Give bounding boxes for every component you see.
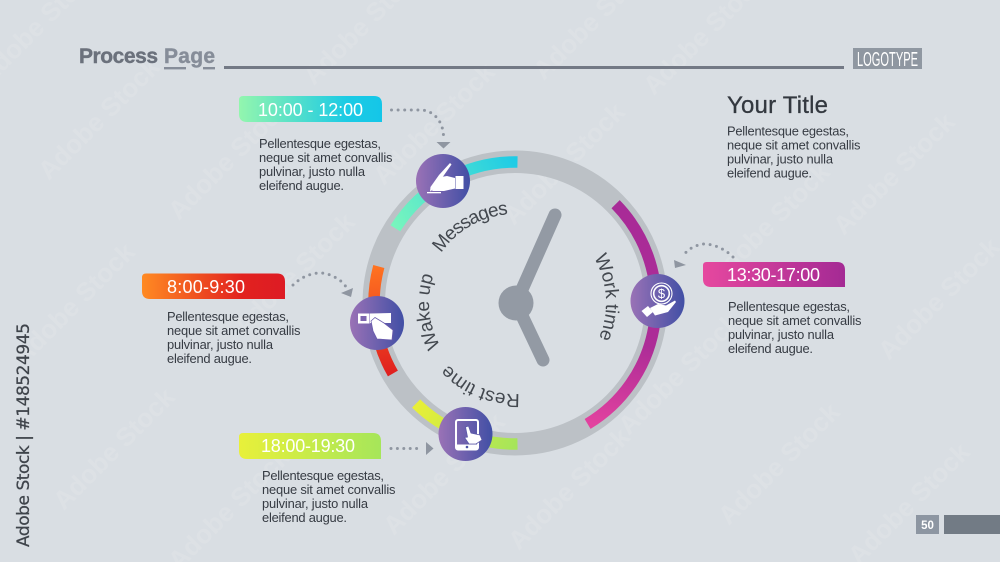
logotype badge bbox=[853, 48, 922, 71]
text block: messages: neque sit amet convallis bbox=[259, 150, 392, 165]
arc: work time segment bbox=[588, 204, 656, 424]
text block: messages: eleifend augue. bbox=[259, 178, 344, 193]
text block: rest time: Pellentesque egestas, bbox=[262, 468, 384, 483]
icon: finger on tablet bbox=[438, 407, 492, 461]
heading: Process Page: Page bbox=[164, 45, 215, 68]
curved label: Messages: Messages bbox=[432, 204, 508, 252]
text block: messages bbox=[259, 136, 392, 193]
text block: rest time bbox=[262, 468, 396, 525]
text: Adobe Stock bbox=[612, 306, 746, 440]
title block: Your Title: Pellentesque egestas, bbox=[727, 124, 849, 138]
title block: Your Title: neque sit amet convallis bbox=[727, 138, 860, 152]
page number bbox=[916, 515, 939, 534]
curved label: Wake up: Wake up bbox=[416, 274, 438, 352]
label: 8:00-9:30 bbox=[142, 274, 285, 299]
text: Adobe Stock bbox=[702, 156, 836, 290]
text block: wake up bbox=[167, 309, 300, 366]
text block: work time bbox=[728, 299, 862, 356]
label: 8:00-9:30: 8:00-9:30 bbox=[167, 277, 245, 297]
arrow: rest time bbox=[391, 442, 434, 455]
text: Adobe Stock bbox=[827, 106, 961, 240]
text block: messages: pulvinar, justo nulla bbox=[259, 164, 366, 179]
text block: wake up: Pellentesque egestas, bbox=[167, 309, 289, 324]
icon: hand on wrist watch bbox=[350, 296, 404, 350]
label: 10:00 - 12:00 bbox=[239, 96, 382, 122]
text block: work time: eleifend augue. bbox=[728, 341, 813, 356]
title block: Your Title bbox=[727, 92, 860, 180]
arrow: wake up bbox=[293, 273, 353, 297]
icon: hand holding dollar coin bbox=[630, 274, 684, 328]
title block: Your Title: eleifend augue. bbox=[727, 166, 812, 180]
arc: rest time segment bbox=[416, 404, 518, 444]
text block: wake up: pulvinar, justo nulla bbox=[167, 337, 274, 352]
side credit text: Adobe Stock | #148524945 bbox=[14, 323, 34, 547]
text: Adobe Stock bbox=[497, 96, 631, 230]
page number: 50 bbox=[921, 520, 934, 532]
label: 13:30-17:00 bbox=[703, 262, 845, 287]
text block: work time: Pellentesque egestas, bbox=[728, 299, 850, 314]
text block: work time: pulvinar, justo nulla bbox=[728, 327, 835, 342]
text: Adobe Stock bbox=[712, 396, 846, 530]
text: Adobe Stock bbox=[377, 406, 511, 540]
logotype badge: LOGOTYPE bbox=[857, 49, 918, 71]
icon: hand holding dollar coin: $ bbox=[658, 286, 666, 301]
label: 18:00-19:30 bbox=[239, 433, 381, 459]
text: Adobe Stock bbox=[502, 421, 636, 555]
clock hands bbox=[498, 215, 555, 360]
text block: wake up: neque sit amet convallis bbox=[167, 323, 300, 338]
text: Adobe Stock bbox=[7, 236, 141, 370]
text block: messages: Pellentesque egestas, bbox=[259, 136, 381, 151]
text: Adobe Stock bbox=[227, 206, 361, 340]
arrow: messages bbox=[392, 110, 450, 148]
arc: wake up segment bbox=[374, 266, 393, 374]
curved label: Work time: Work time bbox=[596, 252, 620, 340]
label: 13:30-17:00: 13:30-17:00 bbox=[727, 265, 820, 285]
label: 18:00-19:30: 18:00-19:30 bbox=[261, 436, 355, 456]
arc: messages segment bbox=[395, 162, 518, 228]
title block: Your Title: Your Title bbox=[727, 92, 828, 119]
text: Adobe Stock bbox=[162, 91, 296, 225]
text: Adobe Stock bbox=[367, 56, 501, 190]
text block: rest time: pulvinar, justo nulla bbox=[262, 496, 369, 511]
title block: Your Title: pulvinar, justo nulla bbox=[727, 152, 834, 166]
text block: work time: neque sit amet convallis bbox=[728, 313, 862, 328]
text: Adobe Stock bbox=[32, 51, 166, 185]
text block: rest time: neque sit amet convallis bbox=[262, 482, 396, 497]
heading: Process Page: Process bbox=[79, 45, 158, 68]
curved label: Rest time: Rest time bbox=[443, 366, 518, 408]
label: 10:00 - 12:00: 10:00 - 12:00 bbox=[258, 100, 363, 120]
text block: rest time: eleifend augue. bbox=[262, 510, 347, 525]
arrow: work time bbox=[674, 244, 733, 268]
clock ring bbox=[374, 162, 656, 444]
icon: hand writing with pen bbox=[416, 154, 470, 208]
heading: Process Page bbox=[79, 45, 215, 69]
text: Adobe Stock bbox=[47, 381, 181, 515]
text block: wake up: eleifend augue. bbox=[167, 351, 252, 366]
